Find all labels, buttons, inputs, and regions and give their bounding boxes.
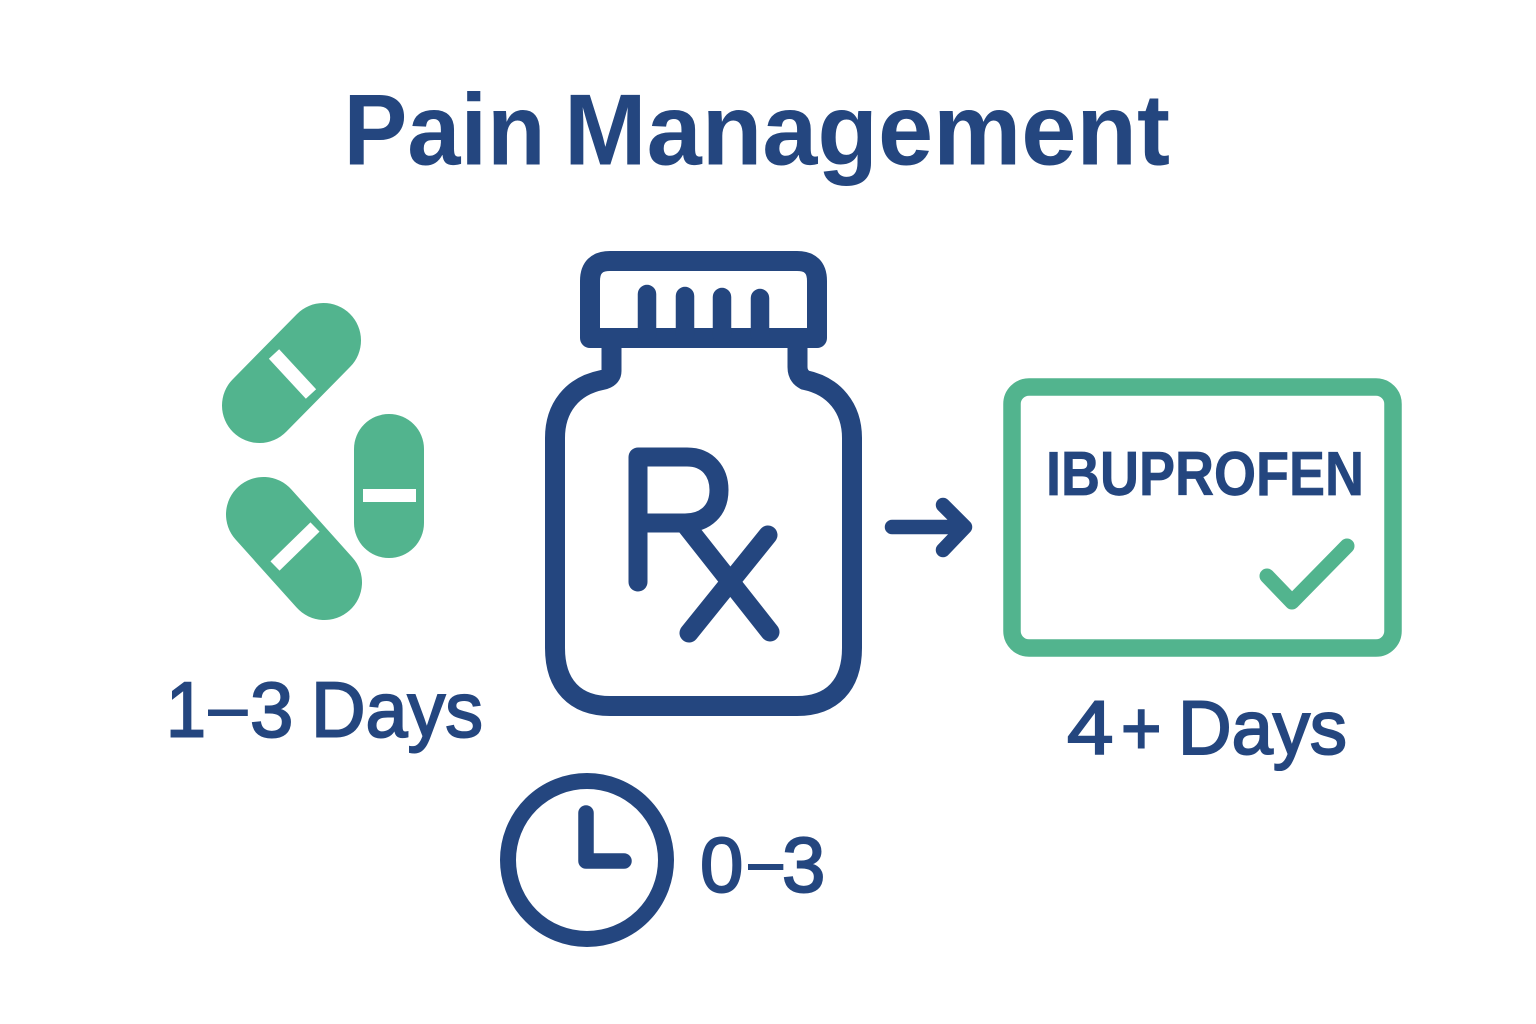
pill: upper diagonal <box>260 340 324 406</box>
label: 0–3: 3 <box>782 820 825 908</box>
icon: clock <box>508 781 666 939</box>
label: 0–3: 0 <box>700 820 743 908</box>
label: 4+ days: 4 <box>1067 686 1114 771</box>
icon: prescription bottle <box>555 261 852 706</box>
card text: IBUPROFEN <box>1046 440 1364 509</box>
icon: check mark <box>1267 546 1347 602</box>
pill: lower diagonal <box>264 514 324 582</box>
label: 4+ days: Days <box>1178 686 1347 771</box>
label: 1–3 days: Days <box>311 666 483 754</box>
label: 0–3: – <box>749 828 783 896</box>
bottle body <box>555 340 852 706</box>
label: 1–3 days: 1 <box>166 666 206 754</box>
pill: vertical <box>363 449 416 523</box>
card border <box>1012 387 1393 648</box>
icon: pills <box>260 340 416 582</box>
Rx symbol <box>638 457 770 633</box>
title: Pain <box>344 74 546 186</box>
label: 4+ days: + <box>1121 686 1162 771</box>
label: 1–3 days: 3 <box>250 666 293 754</box>
bottle cap <box>590 261 817 338</box>
arrow <box>892 505 965 550</box>
label: 1–3 days: – <box>209 669 247 745</box>
panel: ibuprofen card <box>1012 387 1393 648</box>
title: Management <box>564 74 1170 186</box>
